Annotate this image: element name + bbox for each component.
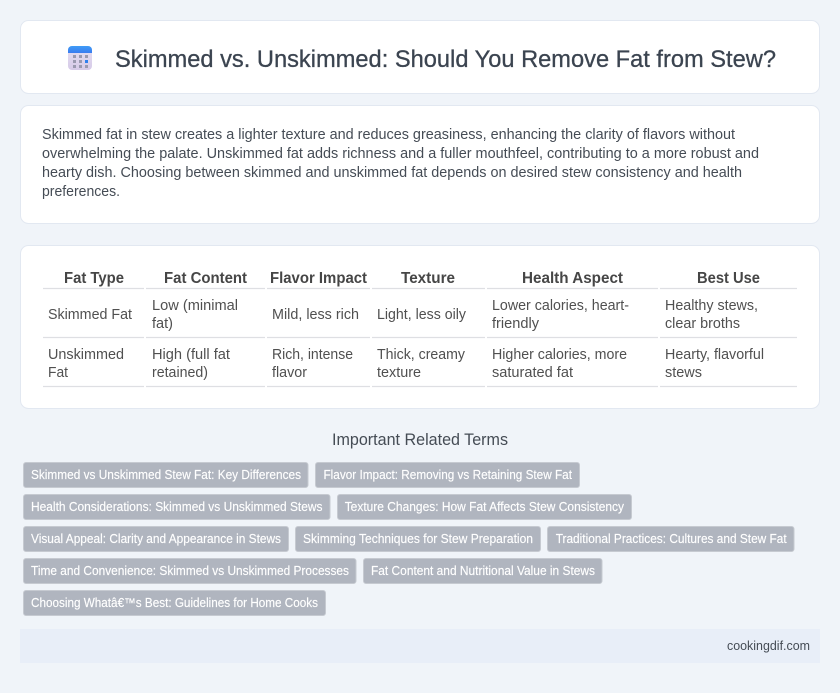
table header row: Fat Type (64, 270, 124, 287)
table row: skimmed fat: Skimmed Fat (48, 307, 132, 323)
tag row 3: Visual Appeal: Clarity and Appearance in Stews (31, 532, 281, 546)
panel: comparison table (20, 246, 820, 408)
text block: summary: hearty dish. Choosing between skimmed and unskimmed fat depends on desired stew consistency and health (42, 165, 742, 181)
footer source text: cookingdif.com (727, 638, 810, 653)
table row: skimmed fat: Light, less oily (377, 307, 467, 323)
heading: related terms: Important Related Terms (332, 431, 508, 449)
table header row: Best Use (697, 270, 760, 287)
table row: skimmed fat: Healthy stews, (665, 298, 758, 314)
table header row (64, 270, 760, 287)
table row: unskimmed fat: retained) (152, 365, 208, 381)
table row: unskimmed fat: Fat (48, 365, 68, 381)
table row: unskimmed fat: saturated fat (492, 365, 573, 381)
table row: unskimmed fat: texture (377, 365, 421, 381)
table row: unskimmed fat: Rich, intense (272, 347, 353, 363)
table row: skimmed fat: Lower calories, heart- (492, 298, 629, 314)
text block: summary: Skimmed fat in stew creates a lighter texture and reduces greasiness, enhancing the clarity of flavors without (42, 127, 735, 143)
table row: skimmed fat: clear broths (665, 316, 740, 332)
tag row 4 (24, 558, 602, 584)
table row: unskimmed fat (48, 347, 764, 381)
title: Skimmed vs. Unskimmed: Should You Remove Fat from Stew? (115, 46, 776, 73)
tag row 5: Choosing Whatâ€™s Best: Guidelines for Home Cooks (31, 596, 318, 610)
table row: skimmed fat: friendly (492, 316, 540, 332)
table row: unskimmed fat: High (full fat (152, 347, 230, 363)
table header row: Health Aspect (522, 270, 624, 287)
table row: unskimmed fat: Thick, creamy (377, 347, 466, 363)
table row: unskimmed fat: stews (665, 365, 702, 381)
table header row: Fat Content (164, 270, 248, 287)
tag row 1 (24, 462, 580, 488)
text block: summary: preferences. (42, 184, 120, 200)
text block: summary: overwhelming the palate. Unskimmed fat adds richness and a fuller mouthfeel, contributing to a more robust and (42, 146, 759, 162)
table row: unskimmed fat: flavor (272, 365, 307, 381)
tag row 4: Fat Content and Nutritional Value in Stews (371, 564, 595, 578)
tag row 3: Skimming Techniques for Stew Preparation (303, 532, 533, 546)
table row: skimmed fat: fat) (152, 316, 173, 332)
table row: unskimmed fat: Hearty, flavorful (665, 347, 764, 363)
panel: related term tags (24, 462, 794, 616)
table row: skimmed fat (48, 298, 758, 332)
tag row 5 (24, 590, 326, 616)
icon: calendar (68, 46, 92, 70)
tag row 4: Time and Convenience: Skimmed vs Unskimmed Processes (31, 564, 349, 578)
table row: unskimmed fat: Higher calories, more (492, 347, 627, 363)
table header row: Texture (401, 270, 455, 287)
tag row 1: Skimmed vs Unskimmed Stew Fat: Key Differences (31, 468, 301, 482)
footer bar (20, 629, 820, 663)
text block: summary (42, 127, 759, 200)
tag row 2 (24, 494, 632, 520)
table row: skimmed fat: Low (minimal (152, 298, 238, 314)
table row: skimmed fat: Mild, less rich (272, 307, 359, 323)
tag row 3: Traditional Practices: Cultures and Stew Fat (556, 532, 787, 546)
table header row: Flavor Impact (270, 270, 368, 287)
tag row 2: Health Considerations: Skimmed vs Unskimmed Stews (31, 500, 322, 514)
table row: unskimmed fat: Unskimmed (48, 347, 124, 363)
panel: title header (20, 20, 820, 94)
tag row 2: Texture Changes: How Fat Affects Stew Consistency (345, 500, 625, 514)
tag row 3 (24, 526, 794, 552)
panel: summary paragraph (20, 106, 820, 224)
tag row 1: Flavor Impact: Removing vs Retaining Stew Fat (324, 468, 572, 482)
